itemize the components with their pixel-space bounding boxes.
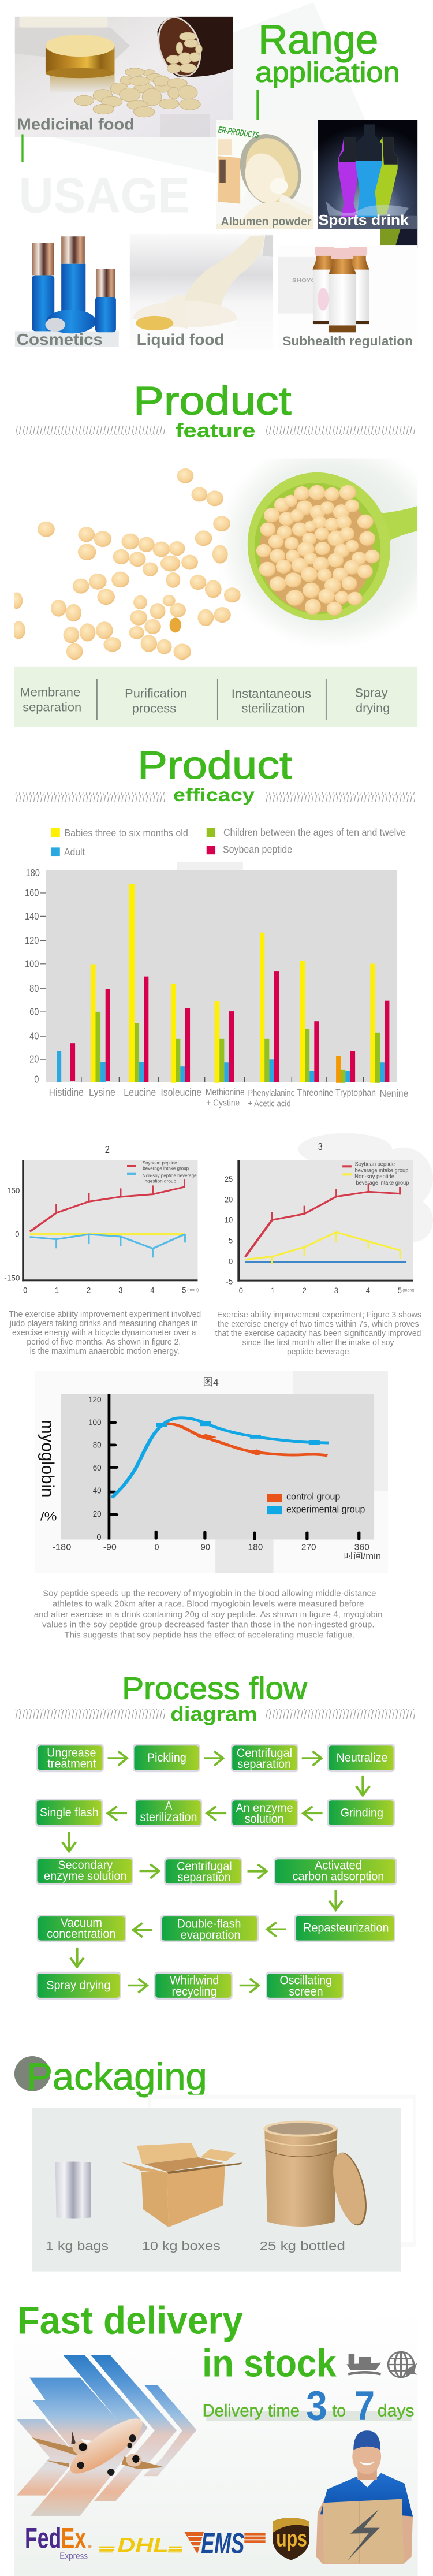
bars: leucine (129, 884, 148, 1082)
illustration: courier with parcel (316, 2430, 413, 2564)
text: figure 4 description (34, 1588, 382, 1640)
delivery time banner: 7 (354, 2383, 375, 2429)
icon: 25 kg drum (263, 2121, 372, 2227)
row 5 steps: Spray drying (46, 1979, 110, 1992)
heading: Product efficacy: efficacy (173, 785, 255, 805)
line chart: figure 2: -150 (4, 1273, 20, 1283)
x axis labels: Threonine (297, 1088, 333, 1098)
x axis labels: Leucine (124, 1087, 156, 1098)
legend (342, 1160, 409, 1186)
logo: FedEx Express: Ex (61, 2522, 86, 2555)
row 5 steps (36, 1972, 344, 2000)
row 3 steps: enzyme solution (44, 1870, 127, 1883)
y axis (25, 868, 46, 1085)
bars: phenylalanine + acetic acid (260, 933, 279, 1082)
series: soybean peptide group (30, 1179, 185, 1231)
legend: experimental group (286, 1504, 365, 1514)
row 4 steps: Vacuum (61, 1916, 102, 1930)
line chart: figure 3: 0 (239, 1286, 243, 1295)
row 2 steps: sterilization (140, 1811, 197, 1824)
row 4 steps: Double-flash (177, 1917, 241, 1931)
heading: in stock: in stock (202, 2342, 337, 2385)
heading: Process flow diagram: Process flow (122, 1671, 307, 1706)
y axis: 120 (25, 935, 39, 946)
text: figure 2 description (9, 1309, 201, 1356)
series: control group (245, 1259, 406, 1265)
label: Liquid food: Liquid food (137, 332, 224, 348)
text: spray drying (355, 686, 390, 715)
bars: tryptophan (336, 1051, 355, 1083)
line chart: figure 4: -180 (52, 1542, 72, 1552)
photo: subhealth regulation (278, 245, 417, 350)
legend: beverage intake group (143, 1166, 189, 1171)
photo: albumen powder (216, 120, 313, 229)
bar chart: amino acid content (25, 862, 408, 1108)
line chart: figure 2 (4, 1144, 199, 1295)
series: non-ingestion baseline (30, 1231, 185, 1237)
section: product feature (10, 379, 433, 727)
line chart: figure 4: 80 (93, 1440, 102, 1450)
y axis: 140 (25, 910, 39, 922)
text: membrane separation: Membrane (20, 685, 80, 699)
icon: globe with plane (388, 2352, 417, 2377)
line chart: figure 4: myoglobin (38, 1420, 58, 1497)
x axis labels: Histidine (49, 1087, 84, 1098)
line chart: figure 3: 3 (318, 1141, 323, 1152)
row 1 steps: treatment (47, 1757, 96, 1771)
text: figure 2 description: exercise energy with a bicycle dynamometer over a (12, 1328, 196, 1337)
background shape (53, 2, 373, 174)
row 3 steps: carbon adsorption (293, 1870, 384, 1883)
logo: FedEx Express: Fed (25, 2522, 61, 2555)
row 1 steps: Pickling (147, 1751, 186, 1765)
illustration: airplane in chevrons (17, 2355, 197, 2516)
section: fast delivery (14, 2298, 418, 2576)
line chart: figure 3: 5 (398, 1286, 402, 1295)
text: purification process: process (132, 702, 176, 715)
row 4 steps: Repasteurization (303, 1922, 389, 1935)
row 2 steps: Single flash (40, 1806, 99, 1819)
line chart: figure 4: -90 (103, 1542, 117, 1552)
line chart: figure 3: 25 (225, 1174, 233, 1183)
bars: threonine (300, 961, 319, 1082)
text: instantaneous sterilization: sterilization (242, 702, 305, 715)
row 4 steps: concentration (47, 1927, 115, 1941)
line chart: figure 2: 0 (23, 1285, 27, 1295)
y axis: 20 (29, 1054, 39, 1064)
legend: Non-soy peptide beverage (143, 1174, 197, 1178)
panel: packaging options (32, 2108, 401, 2272)
line chart: figure 2: 150 (7, 1186, 20, 1195)
photo: liquid food (130, 234, 273, 350)
row 1 steps (36, 1744, 395, 1772)
line chart: figure 3: 2 (303, 1286, 307, 1295)
x axis labels: Nenine (380, 1088, 408, 1099)
text: spray drying: drying (356, 701, 390, 715)
text: purification process: Purification (125, 687, 187, 700)
row 1 steps: Ungrease (47, 1746, 96, 1760)
line chart: figure 2: 2 (105, 1144, 110, 1155)
legend: control group (286, 1492, 340, 1502)
heading: Product feature (133, 379, 292, 442)
row 2 steps: Grinding (341, 1807, 383, 1820)
label: Medicinal food: Medicinal food (17, 115, 135, 133)
text: figure 2 description: is the maximum anaerobic motion energy. (30, 1346, 180, 1356)
blurred background (298, 1133, 433, 1242)
section: range of application (15, 2, 417, 350)
line chart: figure 3: 4 (366, 1286, 370, 1295)
heading: Process flow diagram: diagram (170, 1703, 257, 1726)
row 5 steps: screen (289, 1985, 323, 1998)
line chart: figure 2: 2 (87, 1285, 91, 1295)
legend: Non-soy peptide (354, 1173, 394, 1179)
icon: 1 kg bag (55, 2161, 91, 2219)
delivery time banner (203, 2383, 414, 2429)
text: purification process (125, 687, 187, 715)
line chart: figure 2: 1 (55, 1285, 59, 1295)
y axis: 100 (25, 958, 39, 969)
bars: isoleucine (171, 984, 190, 1083)
text: instantaneous sterilization: Instantaneous (232, 687, 311, 701)
line chart: figure 4 (35, 1371, 388, 1573)
label: Subhealth regulation: Subhealth regulation (282, 334, 413, 348)
row 3 steps: Centrifugal (177, 1860, 232, 1873)
row 3 steps (36, 1857, 397, 1885)
line chart: figure 2: (mont) (187, 1288, 199, 1293)
heading: Process flow diagram (122, 1671, 307, 1726)
legend: Soybean peptide (143, 1161, 177, 1166)
y axis: 180 (25, 868, 40, 878)
logo: EMS: EMS (201, 2527, 244, 2560)
text: membrane separation (20, 685, 81, 714)
section: exercise experiments (4, 1133, 433, 1356)
line chart: figure 2: 5 (182, 1285, 186, 1295)
heading: Fast delivery: Fast delivery (17, 2298, 243, 2342)
row 2 steps: solution (245, 1812, 284, 1826)
labels: 25 kg bottled (260, 2239, 345, 2253)
row 4 steps: evaporation (181, 1929, 241, 1942)
series: soybean peptide group (245, 1183, 401, 1257)
heading: Range application: application (255, 57, 400, 88)
row 1 steps: Neutralize (337, 1751, 388, 1765)
text: instantaneous sterilization (232, 687, 311, 715)
line chart: figure 4: 100 (88, 1417, 102, 1427)
logo: DHL: DHL (117, 2534, 169, 2556)
line chart: figure 3: -5 (226, 1276, 233, 1286)
section: myoglobin (34, 1371, 388, 1640)
line chart: figure 3: 1 (271, 1286, 275, 1295)
label: Cosmetics: Cosmetics (17, 330, 103, 348)
logo: UPS (273, 2518, 309, 2560)
section: process flow (35, 1671, 397, 2000)
text: spray drying: Spray (355, 686, 388, 699)
panel: process features (14, 667, 417, 727)
line chart: figure 3: 5 (229, 1236, 233, 1245)
legend (267, 1492, 365, 1514)
labels: 10 kg boxes (142, 2239, 221, 2253)
label: Sports drink: Sports drink (318, 212, 409, 228)
line chart: figure 2: 4 (150, 1285, 155, 1295)
row 3 steps: Secondary (58, 1859, 113, 1872)
row 1 steps: separation (237, 1758, 291, 1771)
text: figure 3 description: peptide beverage. (287, 1347, 351, 1356)
y axis: 160 (25, 887, 39, 898)
accent lines (21, 90, 259, 162)
photo: medicinal food (15, 14, 233, 137)
delivery time banner: days (378, 2400, 414, 2420)
pale frame (148, 2095, 416, 2247)
heading: Product efficacy: Product (137, 744, 292, 787)
row 2 steps: An enzyme (236, 1801, 293, 1815)
line chart: figure 3: 10 (225, 1215, 233, 1224)
line chart: figure 4: 20 (93, 1509, 102, 1518)
line chart: figure 3: 0 (229, 1256, 233, 1266)
row 3 steps: separation (178, 1871, 231, 1884)
line chart: figure 4: 360 (354, 1542, 369, 1552)
line chart: figure 3: (mont) (402, 1288, 414, 1293)
labels: 1 kg bags (46, 2239, 109, 2253)
legend: Soybean peptide (355, 1160, 395, 1167)
row 1 steps: Centrifugal (237, 1747, 292, 1760)
photo: albumen powder: ER-PRODUCTS (217, 124, 260, 140)
x axis labels: + Acetic acid (248, 1100, 291, 1108)
series: control group (167, 1424, 327, 1455)
arrows (62, 1751, 369, 1993)
y axis: 40 (29, 1030, 39, 1041)
series: experimental group (112, 1418, 329, 1498)
line chart: figure 4: 120 (88, 1395, 102, 1404)
photo: cosmetics (15, 235, 126, 350)
watermark: USAGE: USAGE (19, 168, 190, 224)
logo: EMS (185, 2527, 266, 2560)
photo: subhealth regulation: SHOYO (292, 277, 316, 284)
x axis labels: Lysine (89, 1087, 115, 1098)
row 2 steps: A (165, 1799, 173, 1813)
line chart: figure 4: 时间/min (344, 1551, 381, 1561)
logo: UPS: ups (276, 2526, 307, 2551)
chart legend: Adult (64, 846, 85, 858)
bars: lysine (91, 964, 110, 1082)
line chart: figure 4: 180 (248, 1542, 263, 1552)
line chart: figure 3: 3 (334, 1286, 338, 1295)
text: figure 2 description: judo players taking drinks and measuring changes in (9, 1319, 198, 1328)
line chart: figure 4: 60 (93, 1463, 102, 1472)
heading: Product efficacy (137, 744, 292, 805)
chart legend: Babies three to six months old (64, 827, 188, 838)
y axis: 80 (29, 982, 39, 993)
heading: Range application: Range (258, 16, 378, 62)
line chart: figure 3 (225, 1141, 414, 1295)
photo: sports drink (318, 120, 417, 248)
line chart: figure 4: 图4 (203, 1376, 219, 1388)
row 4 steps (37, 1914, 395, 1942)
line chart: figure 2: 3 (118, 1285, 122, 1295)
icon: 10 kg box (121, 2143, 242, 2227)
bars: nenine (370, 964, 389, 1083)
icon: cargo ship (346, 2354, 381, 2376)
background (14, 2310, 418, 2576)
line chart: figure 4: 90 (201, 1542, 210, 1552)
line chart: figure 4: 0 (155, 1542, 159, 1552)
section: product efficacy (25, 744, 408, 1108)
legend: beverage intake group (355, 1167, 409, 1174)
line chart: figure 4: /% (40, 1510, 57, 1524)
delivery time banner: 3 (306, 2383, 327, 2429)
row 2 steps (35, 1799, 395, 1827)
y axis: 60 (29, 1006, 39, 1017)
delivery time banner: Delivery time (203, 2400, 300, 2420)
x axis labels: Phenylalanine (248, 1089, 295, 1097)
label: Albumen powder: Albumen powder (221, 214, 312, 228)
line chart: figure 3: 20 (225, 1195, 233, 1204)
heading: Range application (255, 16, 400, 88)
text: figure 3 description (215, 1310, 421, 1356)
x axis labels (49, 1087, 408, 1108)
x axis labels: Methionine (206, 1087, 245, 1097)
heading: Product feature: Product (133, 379, 292, 423)
series: non-soy peptide group (30, 1234, 185, 1257)
x axis labels: + Cystine (206, 1098, 240, 1108)
series: non-soy peptide group (245, 1232, 401, 1264)
line chart: figure 4: 40 (93, 1486, 102, 1495)
row 3 steps: Activated (315, 1859, 362, 1873)
legend (127, 1161, 197, 1184)
text: figure 2 description: The exercise ability improvement experiment involved (9, 1309, 201, 1319)
y axis: 0 (34, 1074, 39, 1085)
text: membrane separation: separation (23, 701, 81, 714)
line chart: figure 2: 0 (15, 1230, 19, 1239)
logo: FedEx Express: Express (59, 2551, 88, 2562)
text: figure 2 description: period of five months. As shown in figure 2, (27, 1337, 181, 1346)
row 5 steps: Whirlwind (170, 1974, 219, 1987)
bars: histidine (57, 1043, 75, 1082)
line chart: figure 4: 0 (96, 1532, 102, 1542)
row 5 steps: recycling (172, 1985, 216, 1998)
x axis labels: Isoleucine (160, 1087, 201, 1098)
heading: Packaging: Packaging (27, 2056, 207, 2097)
line chart: figure 4: 270 (301, 1542, 316, 1552)
heading: Product feature: feature (176, 419, 255, 442)
photo: soybeans in green spoon (14, 459, 418, 660)
section: packaging (14, 2056, 416, 2272)
x axis labels: Tryptophan (335, 1088, 376, 1098)
bars: methionine + cystine (215, 1001, 234, 1083)
chart legend: Soybean peptide (223, 844, 292, 855)
labels (46, 2239, 345, 2253)
delivery time banner: to (332, 2400, 346, 2420)
chart legend (51, 827, 406, 858)
decorative oval (14, 2056, 50, 2091)
legend: ingestion group (144, 1179, 177, 1184)
row 5 steps: Oscillating (280, 1974, 332, 1987)
